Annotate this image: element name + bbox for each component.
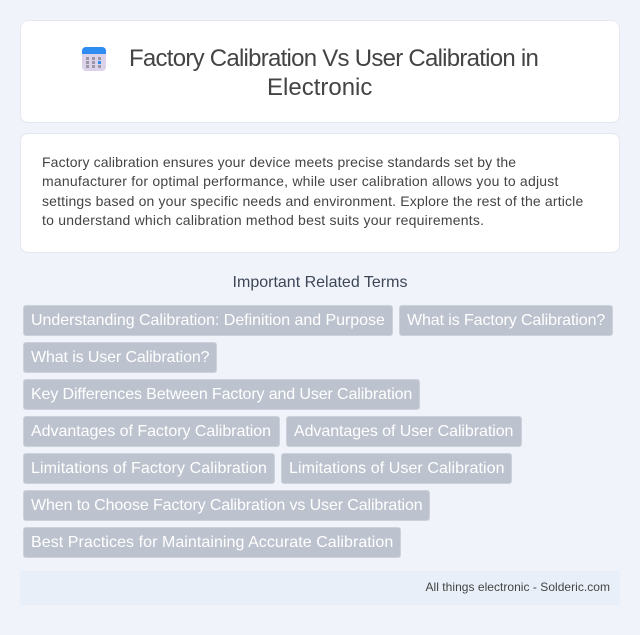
intro text: Factory calibration ensures your device meets precise standards set by the — [42, 154, 516, 170]
tag — [23, 416, 280, 447]
footer bar — [20, 571, 620, 605]
tag: What is User Calibration? — [31, 349, 209, 366]
tag — [23, 527, 401, 558]
footer text: All things electronic - Solderic.com — [426, 580, 610, 594]
header panel — [20, 20, 620, 123]
tag: When to Choose Factory Calibration vs User Calibration — [31, 497, 423, 514]
tag — [23, 342, 217, 373]
intro text: to understand which calibration method best suits your requirements. — [42, 212, 484, 228]
tag: What is Factory Calibration? — [407, 312, 605, 329]
title — [129, 45, 538, 101]
tag: Best Practices for Maintaining Accurate Calibration — [31, 534, 393, 551]
section heading: Important Related Terms — [233, 274, 407, 291]
tag: Key Differences Between Factory and User Calibration — [31, 386, 412, 403]
tag list — [23, 305, 613, 558]
tag — [23, 305, 393, 336]
tag: Limitations of User Calibration — [289, 460, 505, 477]
title: Electronic — [267, 74, 372, 101]
tag — [23, 379, 420, 410]
tag — [23, 453, 275, 484]
tag — [281, 453, 512, 484]
intro text — [42, 154, 583, 228]
tag: Advantages of Factory Calibration — [31, 423, 271, 440]
tag: Understanding Calibration: Definition and Purpose — [31, 312, 385, 329]
intro panel — [20, 133, 620, 253]
tag — [286, 416, 522, 447]
intro text: manufacturer for optimal performance, while user calibration allows you to adjust — [42, 173, 559, 189]
tag — [399, 305, 613, 336]
intro text: settings based on your specific needs and environment. Explore the rest of the article — [42, 193, 583, 209]
tag — [23, 490, 430, 521]
title: Factory Calibration Vs User Calibration in — [129, 45, 538, 72]
tag: Limitations of Factory Calibration — [31, 460, 267, 477]
icon: calendar — [82, 47, 106, 71]
tag: Advantages of User Calibration — [294, 423, 513, 440]
